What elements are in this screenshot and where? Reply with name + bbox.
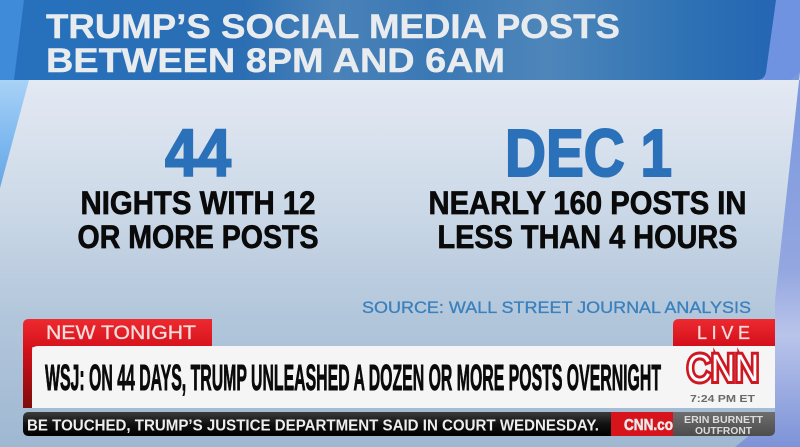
source note: SOURCE: WALL STREET JOURNAL ANALYSIS xyxy=(362,298,751,317)
show name: OUTFRONT xyxy=(695,426,752,437)
stat: Dec 1: NEARLY 160 POSTS IN xyxy=(428,185,746,221)
CNN.com badge xyxy=(611,412,673,436)
stat: 44 nights: OR MORE POSTS xyxy=(78,219,318,255)
heading: BETWEEN 8PM AND 6AM xyxy=(46,42,505,80)
new tonight tag xyxy=(23,319,212,408)
show name xyxy=(673,412,775,437)
stat: Dec 1: LESS THAN 4 HOURS xyxy=(438,219,738,255)
headline banner xyxy=(32,346,775,408)
broadcast time: 7:24 PM ET xyxy=(690,393,756,405)
news ticker: BE TOUCHED, TRUMP’S JUSTICE DEPARTMENT SAID IN COURT WEDNESDAY. xyxy=(27,418,599,434)
stat: Dec 1: DEC 1 xyxy=(505,116,672,191)
news ticker xyxy=(23,412,775,437)
CNN logo xyxy=(687,348,759,405)
show name: ERIN BURNETT xyxy=(684,415,763,426)
new tonight tag: NEW TONIGHT xyxy=(46,323,196,344)
header band xyxy=(0,0,800,80)
CNN logo: CNN xyxy=(687,348,759,390)
heading: TRUMP’S SOCIAL MEDIA POSTS xyxy=(46,8,620,46)
CNN.com badge: CNN.co xyxy=(624,417,673,434)
stat: 44 nights: NIGHTS WITH 12 xyxy=(80,185,316,221)
stat: 44 nights: 44 xyxy=(165,116,231,191)
heading xyxy=(46,8,620,80)
live tag xyxy=(673,319,775,346)
stat: Dec 1 xyxy=(428,116,746,255)
live tag: LIVE xyxy=(697,323,750,343)
stat: 44 nights xyxy=(78,116,318,255)
